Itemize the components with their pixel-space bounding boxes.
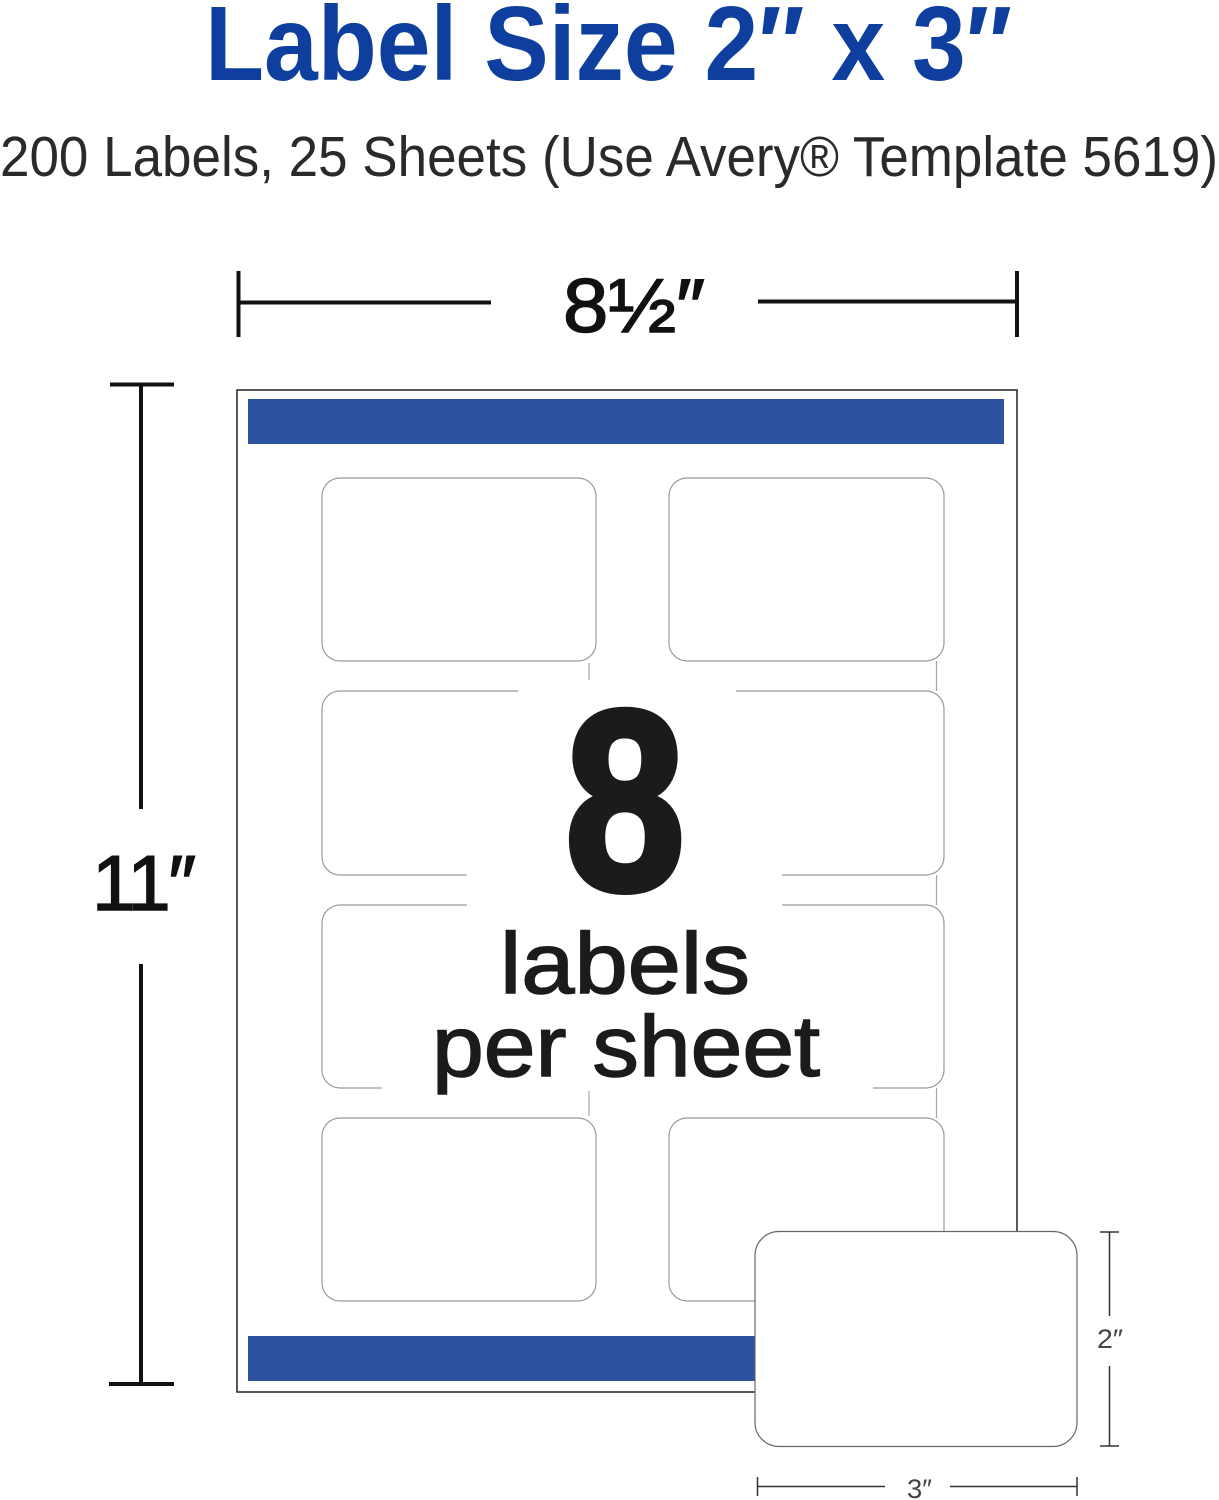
label width dimension: 3 inches <box>757 1474 1077 1500</box>
text: per sheet: per sheet <box>432 999 820 1095</box>
grid of eight labels <box>322 478 944 1301</box>
text: labels: labels <box>500 916 750 1012</box>
width dimension: 8 1/2 inches <box>238 264 1017 349</box>
bottom blue bar <box>248 1336 1004 1381</box>
panel: label sheet <box>237 390 1017 1392</box>
top blue bar <box>248 399 1004 444</box>
white backing behind count text <box>382 684 873 1096</box>
height dimension: 11 inches <box>92 384 196 1384</box>
big number 8: 8 <box>565 658 685 944</box>
gap ticks between labels <box>589 661 936 1118</box>
single enlarged label <box>755 1232 1077 1446</box>
label height dimension: 2 inches: 2″ <box>1097 1324 1123 1354</box>
width dimension: 8 1/2 inches: 8½″ <box>563 264 705 349</box>
height dimension: 11 inches: 11″ <box>92 839 196 927</box>
label height dimension: 2 inches <box>1097 1232 1123 1446</box>
